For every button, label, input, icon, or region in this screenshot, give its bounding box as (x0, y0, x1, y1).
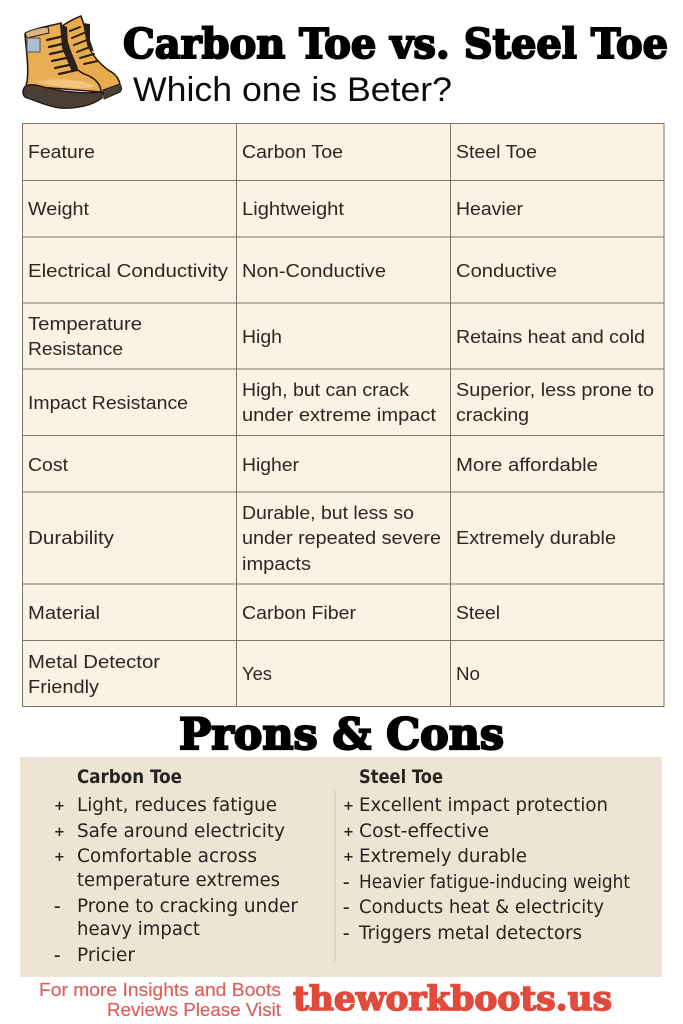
row: metal detector friendly: Metal Detector (28, 651, 160, 672)
row: electrical conductivity: Conductive (456, 260, 557, 281)
subtitle: Which one is Beter? (133, 71, 452, 109)
row: impact resistance: under extreme impact (242, 404, 436, 425)
carbon toe list: Comfortable across (77, 845, 257, 867)
row: temperature resistance (28, 313, 645, 359)
row: header: Carbon Toe (242, 141, 343, 162)
steel toe list: + (343, 799, 354, 814)
row: impact resistance: Superior, less prone to (456, 379, 654, 400)
carbon toe list: temperature extremes (77, 869, 280, 891)
row: electrical conductivity (28, 260, 557, 281)
carbon toe list: + (54, 825, 65, 840)
row: durability: impacts (242, 553, 311, 574)
steel toe list: + (343, 850, 354, 865)
row: impact resistance (28, 379, 654, 425)
row: material: Material (28, 602, 100, 623)
heading: pros and cons: Prons & Cons (179, 710, 504, 760)
footer website: theworkboots.us (293, 979, 612, 1019)
row: metal detector friendly: Yes (242, 663, 272, 684)
row: temperature resistance: Temperature (28, 313, 142, 334)
comparison table (22, 123, 664, 707)
steel toe list: – (343, 901, 350, 916)
steel toe list: Triggers metal detectors (358, 922, 582, 944)
title: Carbon Toe vs. Steel Toe (123, 20, 668, 68)
steel toe list (343, 766, 630, 944)
steel toe list: Cost-effective (359, 820, 489, 842)
row: impact resistance: cracking (456, 404, 529, 425)
row: metal detector friendly: No (456, 663, 480, 684)
row: header: Steel Toe (456, 141, 537, 162)
carbon toe list (54, 766, 298, 966)
steel toe list: Conducts heat & electricity (359, 896, 604, 918)
carbon toe list: Carbon Toe (77, 766, 182, 788)
row: durability: under repeated severe (242, 527, 441, 548)
row: weight: Heavier (456, 198, 523, 219)
row: durability (28, 502, 616, 574)
row: weight (28, 198, 523, 219)
row: temperature resistance: Resistance (28, 338, 123, 359)
row: cost: More affordable (456, 454, 598, 475)
carbon toe list: + (54, 850, 65, 865)
row: durability: Durability (28, 527, 115, 548)
row: metal detector friendly: Friendly (28, 676, 100, 697)
row: durability: Extremely durable (456, 527, 616, 548)
steel toe list: – (343, 927, 350, 942)
row: cost: Higher (242, 454, 299, 475)
row: metal detector friendly (28, 651, 480, 697)
footer call to action: Reviews Please Visit (107, 999, 281, 1020)
steel toe list: Excellent impact protection (359, 794, 608, 816)
carbon toe list: – (54, 900, 60, 915)
row: electrical conductivity: Electrical Conductivity (28, 260, 229, 281)
row: durability: Durable, but less so (242, 502, 414, 523)
row: material: Carbon Fiber (242, 602, 356, 623)
steel toe list: Steel Toe (359, 766, 443, 788)
row: header (28, 141, 537, 162)
carbon toe list: + (54, 799, 65, 814)
carbon toe list: Prone to cracking under (77, 895, 298, 917)
footer call to action: For more Insights and Boots (39, 979, 281, 1000)
carbon toe list: Light, reduces fatigue (77, 794, 277, 816)
row: material (28, 602, 500, 623)
row: impact resistance: High, but can crack (242, 379, 410, 400)
footer call to action (39, 979, 281, 1020)
panel: pros and cons (20, 757, 662, 977)
steel toe list: – (343, 876, 350, 891)
steel toe list: Extremely durable (359, 845, 527, 867)
steel toe list: Heavier fatigue-inducing weight (359, 871, 630, 893)
carbon toe list: heavy impact (77, 918, 200, 940)
carbon toe list: Safe around electricity (77, 820, 285, 842)
row: weight: Lightweight (242, 198, 344, 219)
row: weight: Weight (28, 198, 89, 219)
row: impact resistance: Impact Resistance (28, 392, 188, 413)
carbon toe list: Pricier (77, 944, 135, 966)
steel toe list: + (343, 825, 354, 840)
row: cost: Cost (28, 454, 68, 475)
row: cost (28, 454, 598, 475)
carbon toe list: – (54, 949, 60, 964)
row: electrical conductivity: Non-Conductive (242, 260, 386, 281)
row: header: Feature (28, 141, 95, 162)
row: material: Steel (456, 602, 500, 623)
row: temperature resistance: High (242, 326, 282, 347)
row: temperature resistance: Retains heat and cold (456, 326, 645, 347)
icon: work boots (23, 16, 122, 108)
